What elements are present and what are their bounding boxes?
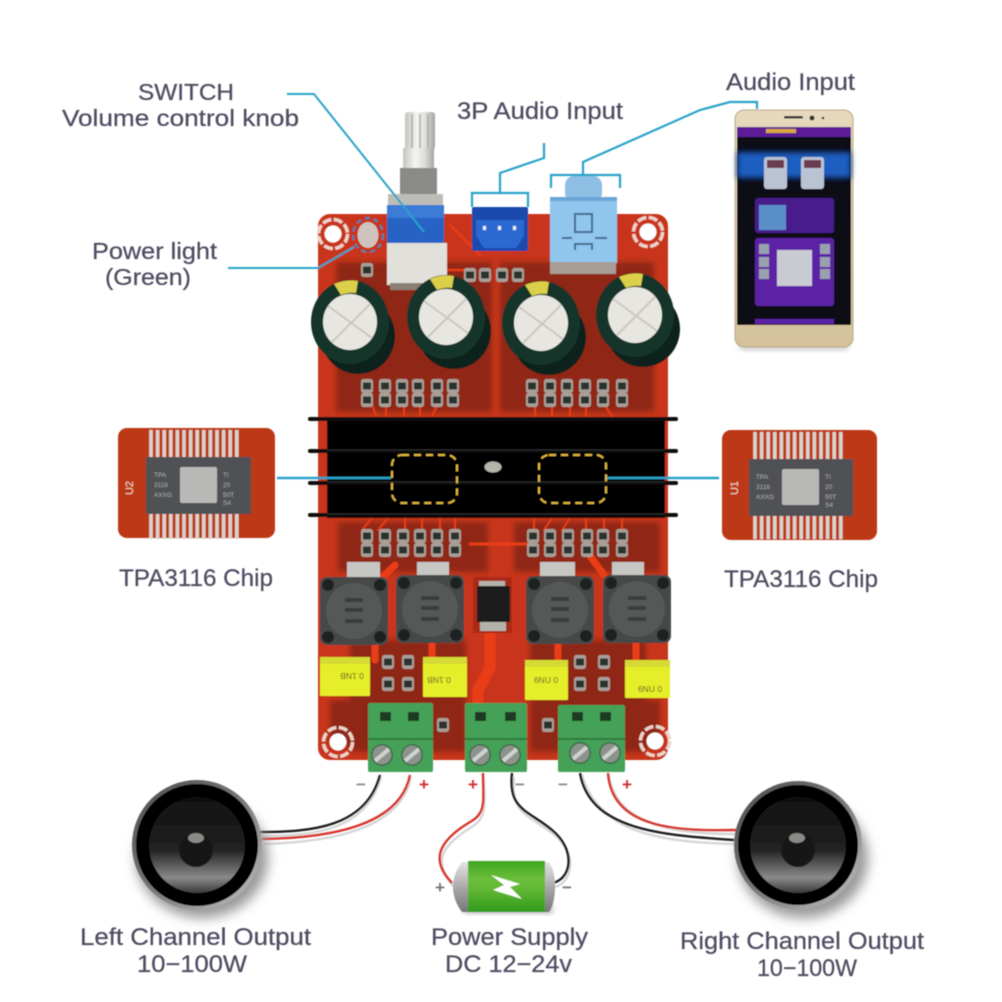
chip marking: TPA xyxy=(154,472,167,479)
screen footer bar xyxy=(755,319,834,324)
polarity markers xyxy=(356,775,632,897)
polarity markers: + xyxy=(419,775,429,794)
polarity markers: − xyxy=(562,878,572,897)
chip package xyxy=(146,457,251,514)
black surround xyxy=(136,784,258,906)
label: right chip: TPA3116 Chip xyxy=(724,566,878,593)
label: audio input: Audio Input xyxy=(726,69,855,96)
callout line: right chip xyxy=(607,477,719,479)
screen device displays xyxy=(767,160,821,168)
screw terminal right xyxy=(558,705,625,772)
dust cap highlight xyxy=(789,833,805,843)
chip marking: S4 xyxy=(825,502,833,509)
electrolytic capacitors xyxy=(311,273,680,375)
socket bottom xyxy=(550,262,616,274)
screen header xyxy=(737,127,851,137)
black surround xyxy=(738,785,858,905)
chip marking: S4 xyxy=(223,500,231,507)
chip package xyxy=(749,459,853,516)
chip marking: 3116 xyxy=(154,482,168,489)
right speaker xyxy=(734,781,868,918)
thermal pad xyxy=(180,467,217,503)
dashed chip location right xyxy=(539,455,606,503)
inductors xyxy=(320,562,671,645)
chip panel xyxy=(118,428,275,538)
screen thumbnails xyxy=(759,244,830,279)
callout line: left chip xyxy=(277,477,391,479)
chip panel xyxy=(722,430,877,540)
speaker shadow xyxy=(738,798,868,918)
heat sink xyxy=(310,418,676,518)
phone body xyxy=(735,110,853,347)
screen thumbnail xyxy=(759,205,786,230)
white base xyxy=(387,243,447,285)
left speaker xyxy=(132,780,268,918)
left speaker wires xyxy=(260,775,410,839)
battery shadow xyxy=(464,904,552,913)
shaft ribs xyxy=(412,114,428,148)
battery right cap xyxy=(545,862,555,912)
blue switch housing xyxy=(387,205,444,245)
callout line: switch xyxy=(287,94,424,232)
connector opening xyxy=(476,220,524,248)
yellow film capacitors: 0.1NB xyxy=(340,671,364,681)
chip detail left xyxy=(118,428,275,539)
polarity markers: − xyxy=(356,775,366,794)
cone xyxy=(750,797,846,893)
callout line: 3P audio input xyxy=(472,143,544,207)
screw terminal left xyxy=(368,703,433,772)
chip marking: TPA xyxy=(756,474,769,481)
chip pins bottom xyxy=(755,511,841,539)
audio jack socket xyxy=(550,176,617,274)
chip pins top xyxy=(755,432,841,460)
outer ring xyxy=(132,780,262,910)
screw terminal power xyxy=(465,703,527,772)
screen header text block xyxy=(766,129,796,133)
yellow film capacitors: 6NU 0 xyxy=(638,684,662,694)
chip marking: 20 xyxy=(825,484,833,491)
label: switch and volume control knob xyxy=(62,79,299,131)
right speaker wires xyxy=(580,773,736,840)
phone audio source xyxy=(735,110,853,350)
screen blue glow xyxy=(737,152,851,178)
screen purple panel bottom xyxy=(755,238,834,306)
polarity markers: + xyxy=(622,775,632,794)
label: right channel output: 10−100W xyxy=(757,955,857,982)
socket body xyxy=(550,197,617,263)
label: switch and volume control knob: Volume control knob xyxy=(62,105,299,131)
yellow film capacitors xyxy=(320,657,670,700)
PCB darker copper regions xyxy=(330,262,660,752)
phone shadow xyxy=(740,342,848,350)
chip marking: AXXG xyxy=(154,492,172,499)
speaker shadow xyxy=(136,798,268,918)
chip marking: TI xyxy=(825,474,831,481)
housing xyxy=(472,207,528,251)
wire shadows xyxy=(262,775,736,887)
outer ring xyxy=(734,781,862,909)
label: left chip: TPA3116 Chip xyxy=(119,565,273,592)
infographic content xyxy=(62,69,924,982)
label: right channel output xyxy=(680,928,924,982)
thermal pad xyxy=(782,469,819,505)
chip marking: 20 xyxy=(223,482,231,489)
lightning bolt icon xyxy=(491,875,522,899)
metal base xyxy=(388,194,443,210)
chip marking: 50T xyxy=(223,492,234,499)
chip marking: 50T xyxy=(825,494,836,501)
battery xyxy=(453,861,555,913)
power LED xyxy=(353,218,383,252)
label: left channel output: 10−100W xyxy=(137,951,247,978)
power diode xyxy=(473,577,512,633)
dust cap xyxy=(781,833,815,867)
centre screw xyxy=(484,462,502,472)
polarity markers: + xyxy=(468,775,478,794)
label: power light: Power light xyxy=(92,238,218,264)
threaded collar xyxy=(400,168,437,198)
chip marking xyxy=(756,474,836,509)
screen device left xyxy=(764,157,787,189)
heat sink body xyxy=(327,418,665,518)
chip pins bottom xyxy=(151,511,237,539)
3P audio connector xyxy=(472,207,528,251)
label: power light: (Green) xyxy=(105,264,191,290)
battery left cap xyxy=(453,862,468,912)
chip pins top xyxy=(151,430,237,458)
label: power supply: Power Supply xyxy=(431,924,588,951)
screen product picture xyxy=(777,250,812,286)
dust cap xyxy=(179,833,213,867)
base shadow xyxy=(390,283,444,290)
label: 3P audio input: 3P Audio Input xyxy=(457,98,623,125)
polarity markers: + xyxy=(435,878,445,897)
label: power supply xyxy=(431,924,588,978)
volume knob potentiometer xyxy=(387,112,447,290)
PCB base xyxy=(318,214,668,760)
fin highlights xyxy=(327,450,665,514)
knurled shaft xyxy=(405,112,435,150)
screen device right xyxy=(801,157,824,189)
polarity markers: − xyxy=(515,775,525,794)
label: switch and volume control knob: SWITCH xyxy=(138,79,234,105)
panel: amplifier circuit board xyxy=(310,112,680,772)
phone screen xyxy=(737,127,851,325)
yellow film capacitors: 6NU 0 xyxy=(534,675,558,685)
chip marking: 3116 xyxy=(756,484,770,491)
dashed chip location left xyxy=(392,455,457,503)
lighter blue band xyxy=(387,205,444,218)
speaker and camera xyxy=(784,116,824,120)
board designator: U1 xyxy=(729,481,741,495)
power supply wires xyxy=(440,773,569,883)
chip detail right xyxy=(722,430,877,540)
socket detail xyxy=(562,214,607,250)
label: power supply: DC 12−24v xyxy=(445,951,572,978)
chip marking: TI xyxy=(223,472,229,479)
neck xyxy=(403,148,434,170)
connector pins xyxy=(483,226,516,230)
mounting holes xyxy=(318,218,670,756)
cone xyxy=(149,797,245,893)
PCB bright traces xyxy=(362,225,636,704)
label: power light xyxy=(92,238,218,290)
socket top edge xyxy=(550,197,617,201)
yellow film capacitors: 0.1NB xyxy=(427,675,451,685)
plug collar xyxy=(565,176,602,202)
label: left channel output: Left Channel Output xyxy=(80,924,311,951)
polarity markers: − xyxy=(558,775,568,794)
label: left channel output xyxy=(80,924,311,978)
callout line: audio input xyxy=(551,102,757,188)
battery body xyxy=(468,861,545,912)
board designator: U2 xyxy=(124,481,136,495)
callout line: power light xyxy=(228,247,354,268)
heat sink fins xyxy=(310,419,676,515)
chip marking: AXXG xyxy=(756,494,774,501)
chip marking xyxy=(154,472,234,507)
screen purple panel top xyxy=(755,198,834,233)
dust cap highlight xyxy=(188,833,204,843)
label: right channel output: Right Channel Output xyxy=(680,928,924,955)
small SMD components xyxy=(361,263,628,732)
